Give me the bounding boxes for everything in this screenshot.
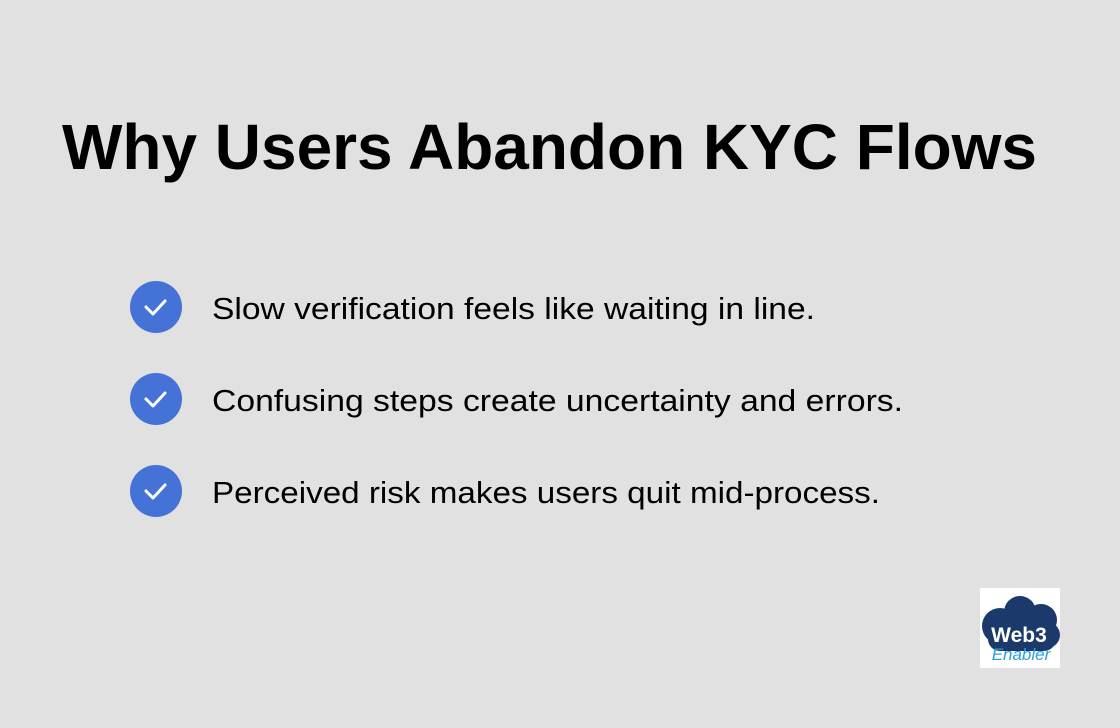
text 1: Slow verification feels like waiting in line.: [212, 291, 815, 326]
list item 1: [130, 281, 815, 333]
icon: check circle 1: [130, 281, 182, 333]
text 2: Confusing steps create uncertainty and errors.: [212, 383, 903, 418]
text 3: Perceived risk makes users quit mid-process.: [212, 475, 880, 510]
icon: check circle 2: [130, 373, 182, 425]
list item 3: [130, 465, 880, 517]
logo: Web3 Enabler: Web3: [991, 624, 1047, 647]
logo: Web3 Enabler: [980, 588, 1060, 668]
title: Why Users Abandon KYC Flows: [62, 111, 1037, 183]
logo: Web3 Enabler: Enabler: [992, 645, 1052, 664]
list item 2: [130, 373, 903, 425]
icon: check circle 3: [130, 465, 182, 517]
